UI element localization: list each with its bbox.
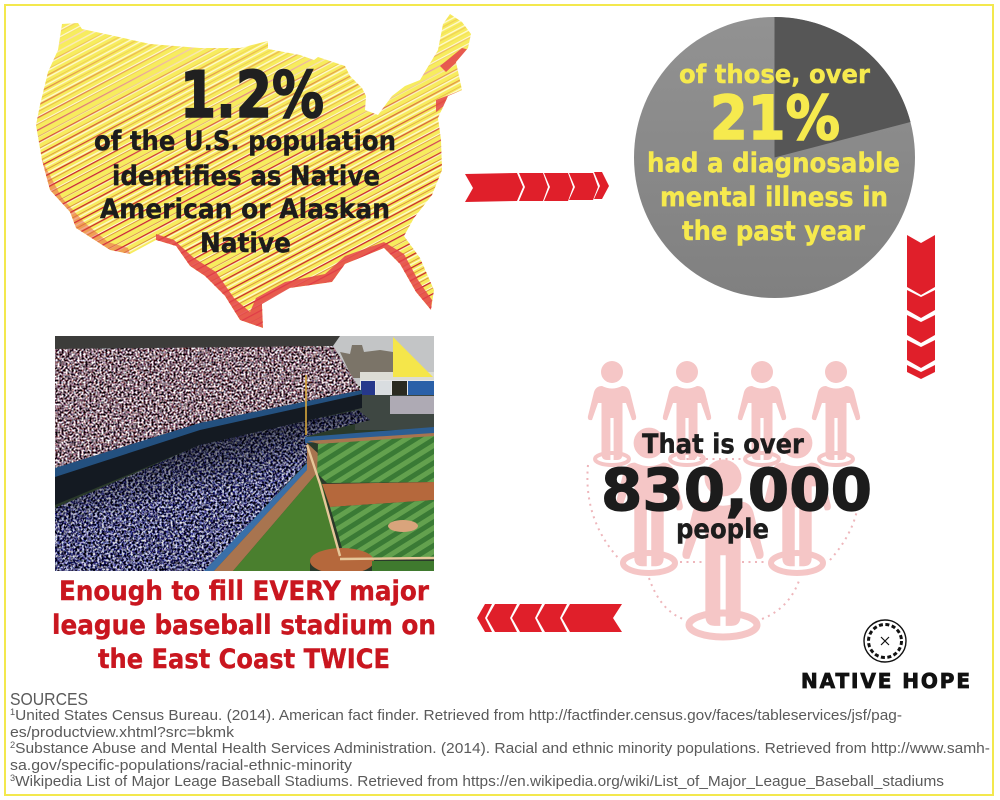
icon: logo seal (864, 620, 906, 662)
icon: connected people network (587, 361, 860, 637)
panel: pie chart statistic (634, 17, 915, 298)
arrow: map to pie chart (465, 172, 609, 202)
source 1 continuation: es/productview.xhtml?src=bkmk (10, 724, 235, 741)
image: stadium photo illustration (55, 336, 434, 574)
text: population description (94, 126, 396, 259)
text: stadium caption: the East Coast TWICE (98, 644, 390, 675)
text: logo wordmark: NATIVE HOPE (801, 669, 970, 693)
arrow: people to stadium (477, 604, 622, 632)
text: diagnosable mental illness: the past year (682, 216, 866, 247)
text: population description: of the U.S. population (94, 126, 396, 157)
text: diagnosable mental illness: had a diagnosable (647, 148, 900, 179)
big number: 21%: 21% (710, 83, 840, 154)
text: stadium caption: Enough to fill EVERY major (59, 576, 430, 607)
big number: 830,000: 830,000 (601, 456, 872, 524)
pie chart: 21 percent slice (634, 17, 915, 298)
heading: sources: SOURCES (10, 689, 88, 709)
text: people: people (676, 514, 769, 545)
text: population description: identifies as Native (112, 161, 380, 192)
source 2: Substance Abuse and Mental Health Services Administration. (2014). Racial and ethnic minority populations. Retrieved from http://www.samh- (15, 740, 990, 757)
panel: people statistic (587, 361, 872, 637)
text: that is over: That is over (642, 429, 805, 460)
source 1: United States Census Bureau. (2014). American fact finder. Retrieved from http://factfinder.census.gov/faces/tableservices/jsf/pag- (15, 707, 902, 724)
text: of those, over: of those, over (679, 60, 870, 90)
text: stadium caption: league baseball stadium on (52, 610, 436, 641)
panel: baseball stadium (52, 336, 436, 675)
logo: Native Hope (801, 620, 970, 693)
panel: US map population statistic (30, 10, 475, 330)
text block: sources (10, 689, 990, 790)
source 3: Wikipedia List of Major Leage Baseball Stadiums. Retrieved from https://en.wikipedia.org/wiki/List_of_Major_League_Baseball_stadiums (15, 773, 944, 790)
icon: hatched US map (30, 10, 475, 330)
source 2: 2 (10, 740, 15, 750)
text: diagnosable mental illness: mental illness in (660, 182, 888, 213)
text: stadium caption (52, 576, 436, 675)
big number: 1.2%: 1.2% (180, 59, 324, 133)
source 3: 3 (10, 773, 15, 783)
text: diagnosable mental illness (647, 148, 900, 247)
icon: yellow folded corner (393, 337, 433, 377)
source 2 continuation: sa.gov/specific-populations/racial-ethnic-minority (10, 757, 353, 774)
arrow: pie chart to people (907, 235, 935, 379)
source 1: 1 (10, 707, 15, 717)
text: population description: Native (200, 228, 291, 259)
text: population description: American or Alaskan (100, 194, 390, 225)
